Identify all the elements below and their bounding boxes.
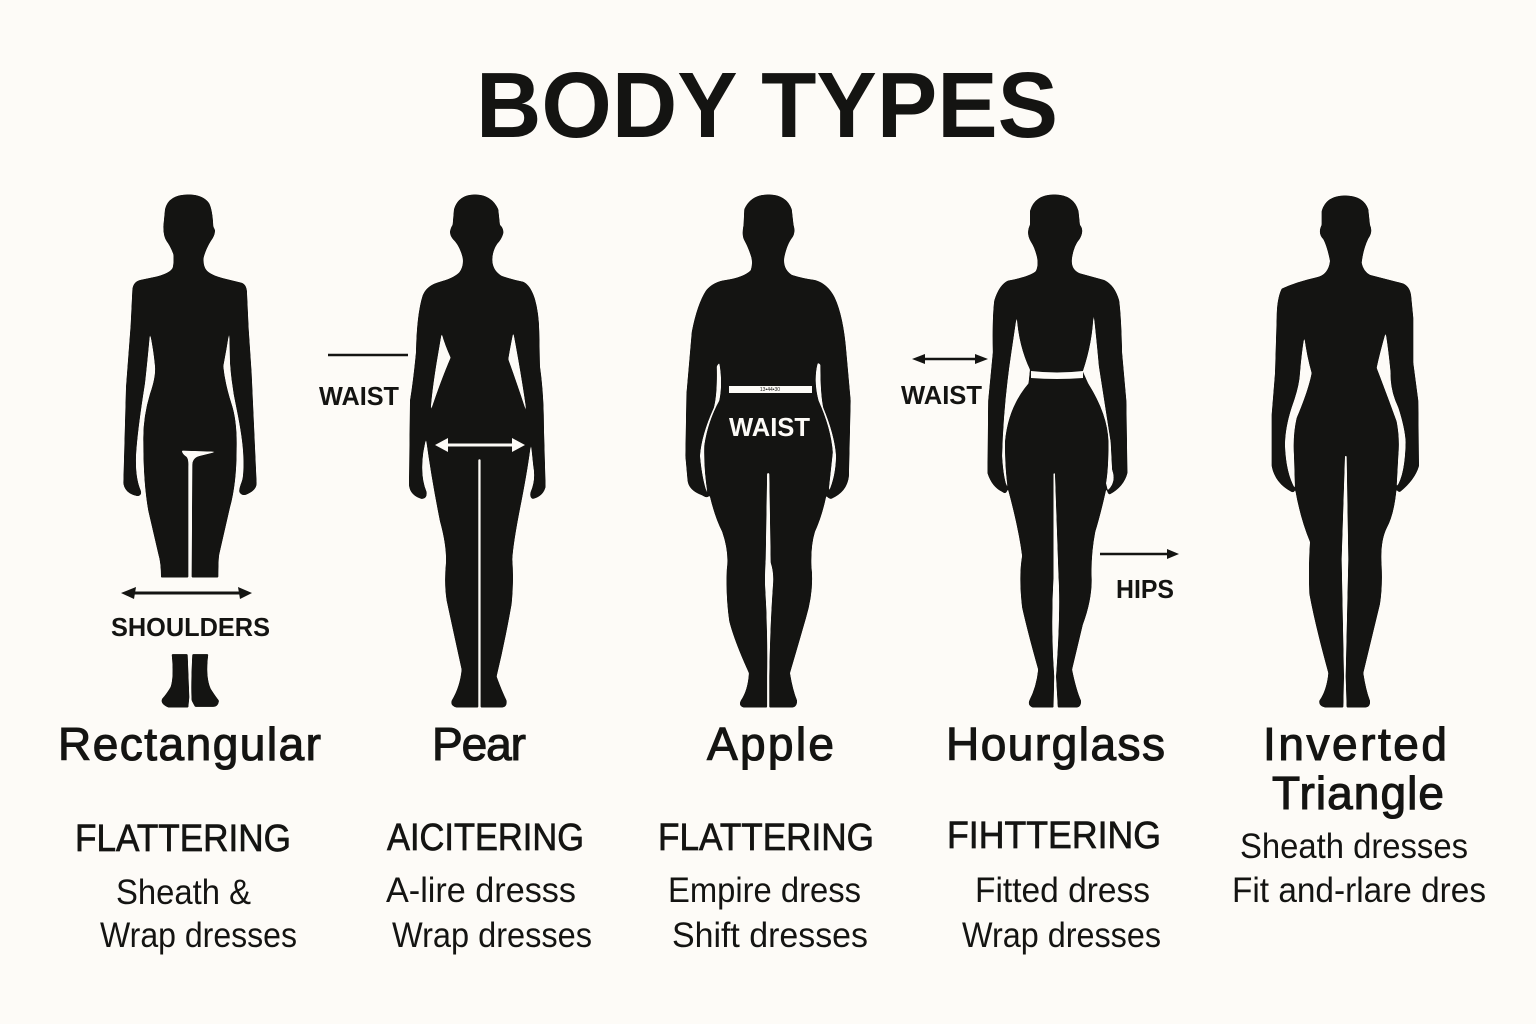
- figure: hourglass silhouette: [987, 194, 1127, 708]
- text block: inverted triangle dresses: Fit and-rlare dres: [1232, 871, 1486, 910]
- text block: inverted triangle dresses: Sheath dresses: [1240, 827, 1468, 866]
- label: pear waist: WAIST: [319, 381, 399, 411]
- label: shoulders: SHOULDERS: [111, 612, 270, 642]
- hourglass waist band: [1031, 371, 1083, 379]
- arrow: shoulders: [121, 587, 252, 599]
- text block: rectangular dresses: Wrap dresses: [100, 916, 297, 955]
- figure: apple silhouette: [685, 194, 851, 708]
- name: inverted triangle: [1263, 718, 1447, 819]
- text block: hourglass dresses: FIHTTERING: [947, 815, 1161, 857]
- apple waist band: [729, 386, 812, 393]
- figure: pear silhouette: [409, 194, 546, 708]
- name: inverted triangle: Triangle: [1272, 767, 1444, 819]
- text block: pear dresses: AICITERING: [387, 817, 584, 859]
- text block: rectangular dresses: FLATTERING: [75, 818, 291, 860]
- waist line: pear: [328, 354, 408, 356]
- text block: apple dresses: Empire dress: [668, 871, 861, 910]
- arrow: hips: [1100, 549, 1179, 559]
- text block: hourglass dresses: Wrap dresses: [962, 916, 1161, 955]
- text block: apple dresses: Shift dresses: [672, 916, 868, 955]
- name: hourglass: Hourglass: [946, 718, 1165, 770]
- text block: pear dresses: [386, 817, 592, 955]
- text block: apple dresses: FLATTERING: [658, 817, 874, 859]
- label: hourglass waist: WAIST: [901, 380, 982, 410]
- figure: inverted triangle silhouette: [1272, 196, 1419, 708]
- label: hips: HIPS: [1116, 574, 1174, 604]
- text block: inverted triangle dresses: [1232, 827, 1486, 910]
- figure: rectangular silhouette: [123, 194, 257, 708]
- name: rectangular: Rectangular: [58, 718, 321, 770]
- apple waist band: 13•44•30: [760, 387, 780, 393]
- text block: hourglass dresses: Fitted dress: [975, 871, 1150, 910]
- text block: hourglass dresses: [947, 815, 1161, 955]
- text block: pear dresses: A-lire dresss: [386, 871, 576, 910]
- arrow: pear hips: [435, 438, 525, 452]
- text block: rectangular dresses: Sheath &: [116, 873, 251, 912]
- title: BODY TYPES: [476, 53, 1058, 157]
- name: apple: Apple: [707, 718, 834, 770]
- name: inverted triangle: Inverted: [1263, 718, 1447, 770]
- label: apple waist: WAIST: [729, 412, 810, 442]
- text block: rectangular dresses: [75, 818, 297, 955]
- name: pear: Pear: [432, 718, 526, 770]
- text block: apple dresses: [658, 817, 874, 955]
- arrow: hourglass waist: [912, 354, 988, 364]
- text block: pear dresses: Wrap dresses: [392, 916, 592, 955]
